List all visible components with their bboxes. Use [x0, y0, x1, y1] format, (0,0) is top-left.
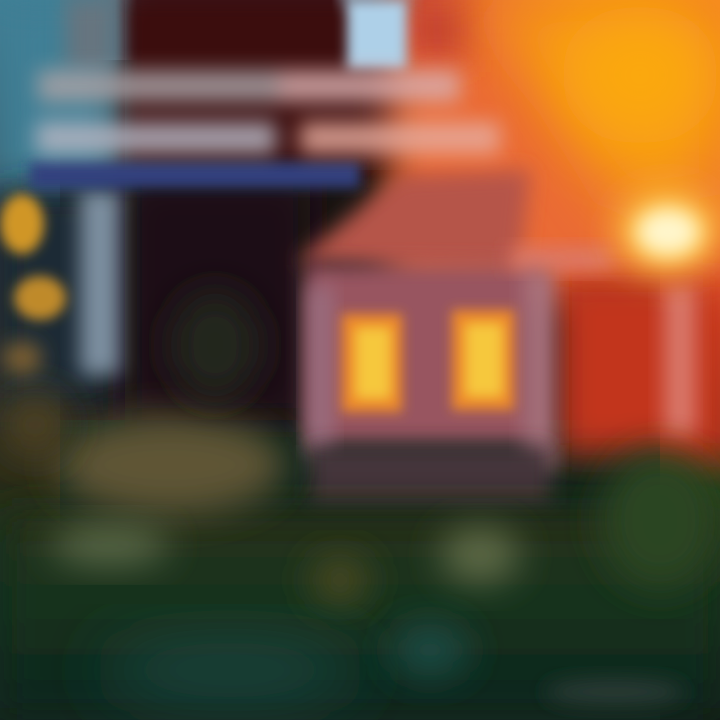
window: right glowing window [452, 310, 514, 410]
house: bright eave and porch beam [512, 248, 612, 270]
window: light blue sky opening [347, 0, 407, 70]
house: wall [305, 265, 540, 445]
house: foundation [310, 445, 550, 505]
house: porch post right [664, 285, 696, 435]
pillar: top left column [66, 0, 116, 70]
house: porch post left [524, 270, 554, 470]
window: left glowing window [342, 314, 402, 412]
pillar: left blue-grey column [80, 190, 120, 375]
garden: lawn and plants [0, 290, 720, 720]
heading: illegible blurred title lines [36, 70, 500, 154]
sun: bright glow [618, 192, 718, 272]
house: wall corner post [308, 285, 332, 455]
flower: muted bloom lower [2, 342, 42, 374]
house: roof [295, 170, 530, 270]
flower: yellow bloom top [0, 194, 44, 254]
flower: yellow bloom middle [14, 276, 66, 320]
heading band: blue underline [30, 162, 360, 188]
